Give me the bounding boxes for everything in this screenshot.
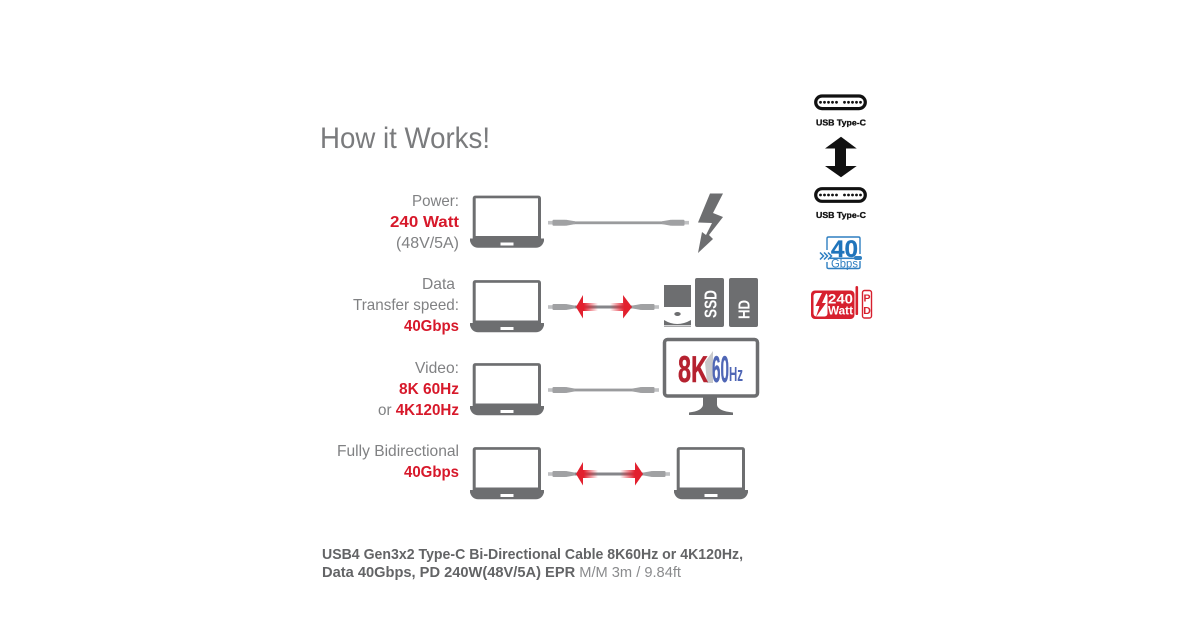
panel: power row bbox=[390, 193, 723, 253]
text: product description: USB4 Gen3x2 Type-C Bi-Directional Cable 8K60Hz or 4K120Hz, bbox=[322, 546, 743, 563]
text: product description bbox=[322, 546, 743, 581]
panel: video row bbox=[378, 340, 758, 419]
cable bbox=[548, 220, 689, 226]
text: power label: (48V/5A) bbox=[396, 235, 459, 252]
icon: 240 Watt PD: D bbox=[863, 305, 871, 317]
icon: USB Type-C top bbox=[816, 96, 866, 128]
icon: 240 Watt PD bbox=[811, 286, 872, 319]
icon: monitor with 8K 60Hz: 8K bbox=[678, 349, 708, 390]
icon: 40 Gbps: 40 bbox=[831, 236, 858, 263]
icon: USB Type-C top: USB Type-C bbox=[816, 118, 866, 128]
text: bidirectional label: Fully Bidirectional bbox=[337, 443, 459, 460]
icon: laptop bbox=[470, 196, 544, 248]
icon: laptop bbox=[470, 447, 544, 499]
text: data label: Data bbox=[422, 276, 455, 293]
icon: SSD: SSD bbox=[700, 290, 720, 318]
title: How it Works! bbox=[320, 122, 490, 155]
icon: lightning bolt bbox=[698, 194, 723, 253]
icon: USB Type-C bottom: USB Type-C bbox=[816, 210, 866, 220]
text: bidirectional label bbox=[337, 443, 459, 481]
icon: monitor with 8K 60Hz: Hz bbox=[729, 364, 743, 386]
cable bbox=[548, 387, 659, 393]
icon: double arrow bbox=[825, 137, 857, 177]
text: data label bbox=[353, 276, 459, 335]
text: data label: 40Gbps bbox=[404, 318, 459, 335]
text: bidirectional label: 40Gbps bbox=[404, 464, 459, 481]
panel: data row bbox=[353, 276, 758, 335]
icon: monitor with 8K 60Hz bbox=[664, 340, 758, 415]
text: power label: 240 Watt bbox=[390, 214, 460, 231]
icon: 40 Gbps bbox=[820, 236, 862, 270]
icon: 240 Watt PD: 240 bbox=[828, 290, 853, 306]
text: video label bbox=[378, 360, 459, 419]
text: data label: Transfer speed: bbox=[353, 297, 459, 314]
text: power label: Power: bbox=[412, 193, 459, 210]
text: video label: Video: bbox=[415, 360, 459, 377]
icon: laptop bbox=[674, 447, 748, 499]
text: video label: 8K 60Hz bbox=[399, 381, 459, 398]
cable with red arrows bbox=[548, 462, 670, 486]
text: power label bbox=[390, 193, 460, 252]
icon: HD bbox=[729, 278, 758, 327]
icon: 40 Gbps: Gbps bbox=[831, 258, 858, 270]
icon: 240 Watt PD: Watt bbox=[828, 304, 853, 318]
icon: monitor with 8K 60Hz: 60 bbox=[712, 349, 729, 390]
panel: bidirectional row bbox=[337, 443, 748, 499]
icon: USB Type-C bottom bbox=[816, 189, 866, 220]
cable with red arrows bbox=[548, 295, 659, 318]
icon: 240 Watt PD: P bbox=[863, 292, 871, 304]
icon: SSD bbox=[695, 278, 724, 327]
text: video label: or 4K120Hz bbox=[378, 402, 459, 419]
text: product description: Data 40Gbps, PD 240W(48V/5A) EPR M/M 3m / 9.84ft bbox=[322, 564, 682, 581]
icon: laptop bbox=[470, 280, 544, 332]
icon: laptop bbox=[470, 363, 544, 415]
icon: HD: HD bbox=[736, 300, 754, 319]
icon: optical drive bbox=[664, 285, 691, 327]
